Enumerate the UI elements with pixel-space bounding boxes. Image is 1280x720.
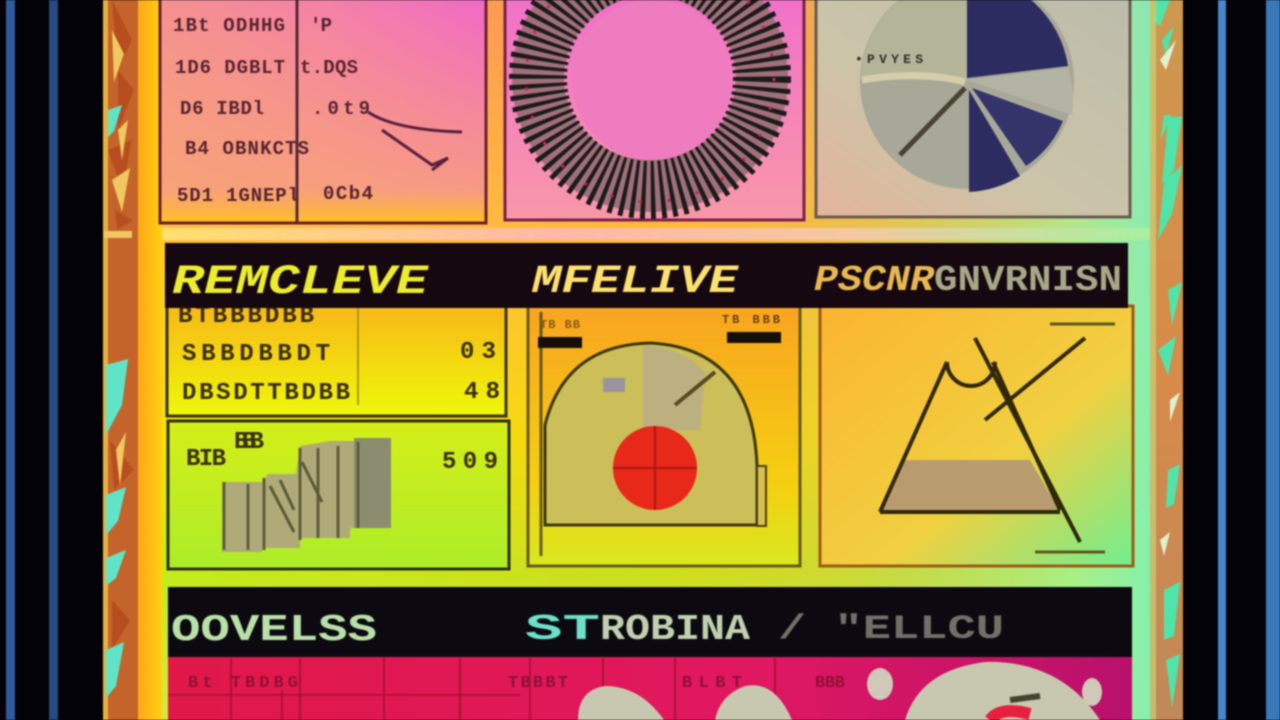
- panel: mid-left table: 48: [464, 379, 500, 406]
- pie: •PVYES: [855, 52, 923, 67]
- blob: left: [578, 686, 664, 720]
- left decorative strip: [103, 0, 162, 720]
- header band: bottom section: ST: [525, 609, 600, 650]
- panel: top-left table: t.DQS: [300, 57, 358, 79]
- header band: bottom section: / "ELLCU: [778, 611, 1004, 649]
- panel: triangle diagram: [820, 306, 1133, 566]
- panel: bottom crimson row: BLBT: [682, 674, 742, 693]
- panel: top-left table: 0Cb4: [323, 183, 373, 205]
- panel: top-left table: D6 IBDl: [180, 98, 264, 120]
- panel: mid-left table: BTBBBDBB: [178, 303, 314, 330]
- 3D bars: [222, 438, 391, 552]
- panel: pie chart: [816, 0, 1130, 217]
- panel: bar chart: BIB: [186, 446, 226, 473]
- red circle: [613, 426, 697, 510]
- header band: middle section: MFELIVE: [531, 260, 739, 305]
- panel: top-left table: 'P: [310, 15, 332, 37]
- header band: middle section: REMCLEVE: [172, 258, 429, 306]
- header band: middle section: [165, 243, 1128, 308]
- panel: top-left table: 1D6 DGBLT: [175, 57, 285, 79]
- arrow lines: [368, 112, 462, 170]
- panel: top-left table: B4 OBNKCTS: [185, 138, 309, 160]
- panel: bottom crimson row: BBB: [815, 674, 845, 693]
- left dark frame with blue rails: [0, 0, 103, 720]
- panel: mid-left table: SBBDBBDT: [182, 341, 330, 368]
- panel: arch diagram: [528, 306, 800, 566]
- panel: mid-left table: 03: [460, 339, 496, 366]
- header band: middle section: GNVRNISN: [934, 260, 1122, 301]
- header band: middle section: PSCNR: [814, 260, 934, 301]
- panel: bar chart: 509: [442, 449, 498, 476]
- right dark frame with blue rails: [1183, 0, 1280, 720]
- panel: top-left table: 5D1 1GNEPl: [177, 185, 299, 207]
- panel: bar chart: [168, 421, 509, 569]
- panel: mid-left table: [167, 303, 506, 416]
- panel: bar chart: BBB: [234, 429, 264, 456]
- blob: large ring: [867, 662, 1102, 720]
- radial spike ring: [526, 0, 774, 202]
- panel: top-left table: [160, 0, 486, 223]
- panel: ring chart: [505, 0, 804, 220]
- panel: top-left table: 1Bt ODHHG: [173, 15, 285, 37]
- pie: [855, 0, 1074, 192]
- panel: top-left table: .0t9: [312, 98, 370, 120]
- trapezoid fill: [880, 460, 1060, 512]
- panel: bottom crimson row: TBBBT: [508, 674, 568, 693]
- blob: centre: [715, 685, 792, 720]
- panel: mid-left table: DBSDTTBDBB: [182, 380, 350, 407]
- header band: bottom section: [168, 587, 1132, 657]
- arch shape: [545, 343, 766, 526]
- triangle lines: [880, 338, 1085, 542]
- right decorative strip: [1150, 0, 1183, 720]
- panel: bottom crimson row: Bt TBDBG: [188, 674, 298, 693]
- header band: bottom section: ROBINA: [600, 609, 750, 650]
- panel: arch diagram: TB BBB: [722, 313, 780, 327]
- header band: bottom section: OOVELSS: [171, 609, 377, 652]
- panel: arch diagram: TB BB: [540, 318, 580, 332]
- panel: bottom crimson row: [168, 657, 1132, 720]
